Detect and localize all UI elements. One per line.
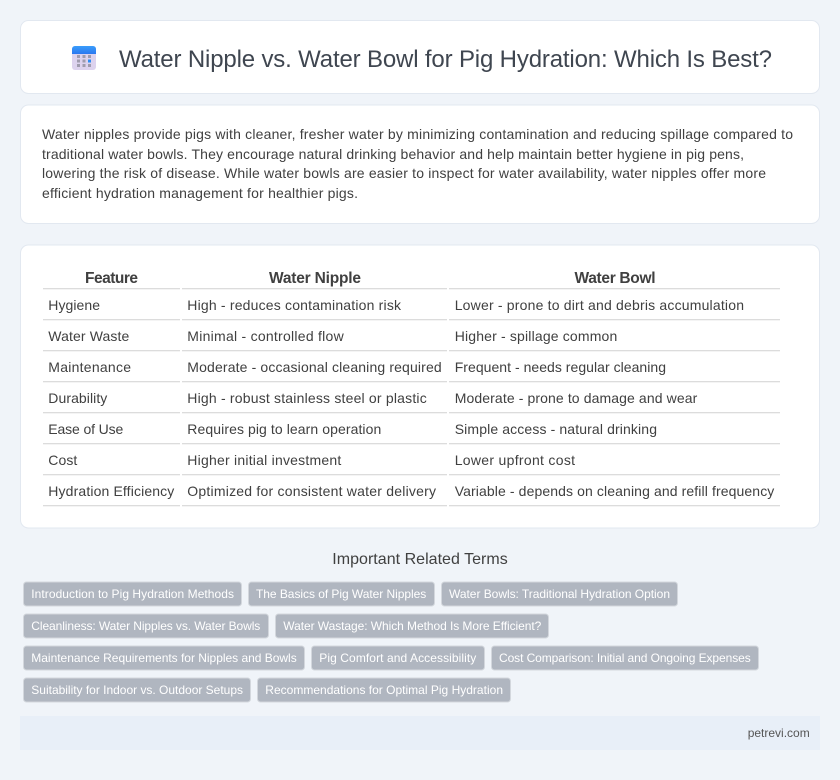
row: ease of use: Requires pig to learn operation [187, 421, 381, 437]
row: cost [43, 452, 780, 475]
tag [276, 614, 548, 638]
tag [258, 678, 510, 702]
table header: Water Nipple [269, 270, 361, 287]
tag: Water Wastage: Which Method Is More Efficient? [283, 619, 542, 633]
tag: Introduction to Pig Hydration Methods [31, 587, 234, 601]
footer [20, 716, 820, 750]
tag: Pig Comfort and Accessibility [319, 651, 476, 665]
tag: Suitability for Indoor vs. Outdoor Setups [31, 683, 243, 697]
text block: introduction: lowering the risk of disease. While water bowls are easier to inspect for water availability, water nipples offer more [42, 165, 766, 181]
heading: important related terms: Important Related Terms [332, 551, 508, 568]
row: ease of use: Simple access - natural drinking [455, 421, 657, 437]
row: maintenance [43, 359, 780, 382]
row: durability: High - robust stainless steel or plastic [187, 390, 427, 406]
tag: The Basics of Pig Water Nipples [256, 587, 426, 601]
icon: calendar [72, 46, 96, 70]
row: hygiene: Hygiene [48, 297, 100, 313]
row: hydration efficiency: Hydration Efficiency [48, 483, 174, 499]
row: water waste: Minimal - controlled flow [187, 328, 345, 344]
row: durability [43, 390, 780, 413]
tag [442, 582, 678, 606]
row: maintenance: Maintenance [48, 359, 131, 375]
row: hydration efficiency [43, 483, 780, 506]
title: Water Nipple vs. Water Bowl for Pig Hydration: Which Is Best? [119, 46, 772, 73]
row: water waste [43, 328, 780, 351]
panel: header [20, 20, 820, 94]
tag [312, 646, 484, 670]
tag [248, 582, 434, 606]
text block: introduction [42, 126, 793, 201]
tag [24, 582, 242, 606]
tag: Recommendations for Optimal Pig Hydration [265, 683, 503, 697]
row: maintenance: Frequent - needs regular cleaning [455, 359, 666, 375]
tag [24, 646, 304, 670]
row: hygiene: Lower - prone to dirt and debris accumulation [455, 297, 744, 313]
tag [24, 678, 250, 702]
panel: introduction text [20, 105, 820, 224]
row: hygiene: High - reduces contamination risk [187, 297, 402, 313]
row: cost: Higher initial investment [187, 452, 341, 468]
table header [43, 270, 780, 289]
text block: introduction: efficient hydration management for healthier pigs. [42, 185, 358, 201]
text block: introduction: traditional water bowls. They encourage natural drinking behavior and help maintain better hygiene in pig pens, [42, 146, 744, 162]
tag [492, 646, 758, 670]
row: maintenance: Moderate - occasional cleaning required [187, 359, 442, 375]
row: cost: Lower upfront cost [455, 452, 575, 468]
tag: Cost Comparison: Initial and Ongoing Expenses [499, 651, 751, 665]
tag: Water Bowls: Traditional Hydration Option [449, 587, 670, 601]
row: water waste: Water Waste [48, 328, 130, 344]
panel: related term tags [24, 582, 758, 702]
row: ease of use: Ease of Use [48, 421, 124, 437]
row: hydration efficiency: Optimized for consistent water delivery [187, 483, 436, 499]
row: durability: Durability [48, 390, 107, 406]
row: water waste: Higher - spillage common [455, 328, 617, 344]
row: durability: Moderate - prone to damage and wear [455, 390, 698, 406]
row: hygiene [43, 297, 780, 320]
row: cost: Cost [48, 452, 77, 468]
row: ease of use [43, 421, 780, 444]
table header: Water Bowl [574, 270, 656, 287]
footer text: site name: petrevi.com [748, 726, 810, 740]
panel: comparison table [20, 245, 820, 528]
table header: Feature [85, 270, 138, 287]
text block: introduction: Water nipples provide pigs with cleaner, fresher water by minimizing contamination and reducing spillage compared to [42, 126, 793, 142]
tag: Cleanliness: Water Nipples vs. Water Bowls [31, 619, 260, 633]
row: hydration efficiency: Variable - depends on cleaning and refill frequency [455, 483, 774, 499]
tag: Maintenance Requirements for Nipples and Bowls [31, 651, 297, 665]
tag [24, 614, 268, 638]
